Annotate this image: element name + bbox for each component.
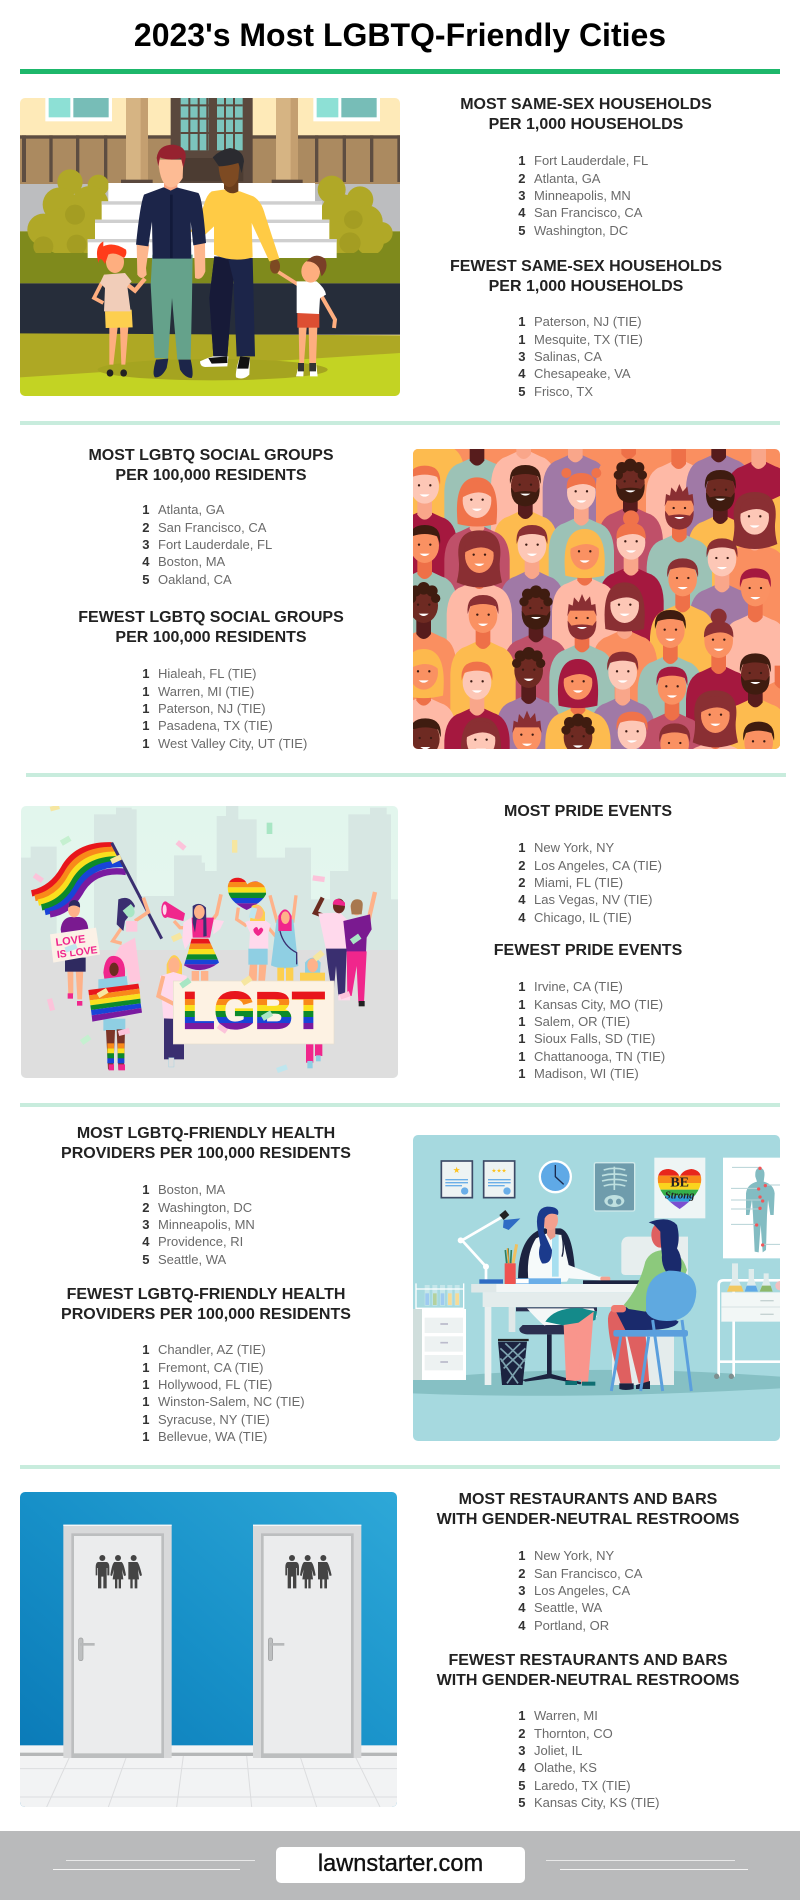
list: fewest pride events: 1 (518, 1014, 526, 1029)
list: most same-sex households: Atlanta, GA (534, 171, 600, 186)
list: fewest pride events: 1 (518, 1066, 526, 1081)
list: most pride events: 2 (518, 875, 526, 890)
city skyline (20, 806, 398, 950)
rainbow heart poster: BE (670, 1176, 689, 1191)
panel: gender-neutral restrooms (20, 1491, 739, 1810)
list: most health providers: Minneapolis, MN (158, 1217, 255, 1232)
confetti (33, 805, 361, 1073)
list: most health providers: 1 (142, 1182, 150, 1197)
list: fewest gender-neutral restrooms: 1 (518, 1708, 526, 1723)
list: most gender-neutral restrooms: 3 (518, 1583, 526, 1598)
list: most gender-neutral restrooms: San Francisco, CA (534, 1566, 642, 1581)
list: fewest same-sex households: 1 (518, 332, 526, 347)
list: fewest gender-neutral restrooms: Kansas City, KS (TIE) (534, 1795, 659, 1810)
list: fewest gender-neutral restrooms: Warren, MI (534, 1708, 598, 1723)
heading: fewest gender-neutral restrooms: FEWEST RESTAURANTS AND BARS (448, 1652, 728, 1669)
list: most gender-neutral restrooms: Seattle, WA (534, 1600, 602, 1615)
list: fewest gender-neutral restrooms: 2 (518, 1726, 526, 1741)
heading: most social groups: PER 100,000 RESIDENTS (115, 467, 307, 484)
list: fewest social groups: Pasadena, TX (TIE) (158, 718, 273, 733)
list: fewest pride events: Chattanooga, TN (TIE) (534, 1049, 665, 1064)
list: most social groups: San Francisco, CA (158, 520, 266, 535)
panel: health providers (61, 1125, 780, 1444)
list: most health providers: Boston, MA (158, 1182, 225, 1197)
patient on blue chair (608, 1219, 696, 1391)
rainbow heart poster: Strong (665, 1190, 695, 1201)
heading: most health providers: PROVIDERS PER 100,000 RESIDENTS (61, 1145, 351, 1162)
panel: same-sex households (20, 96, 722, 399)
man in yellow sweater (190, 148, 280, 379)
list: fewest pride events: Kansas City, MO (TIE) (534, 997, 663, 1012)
list: fewest pride events: Sioux Falls, SD (TIE) (534, 1031, 655, 1046)
list: most pride events: Miami, FL (TIE) (534, 875, 623, 890)
person with heart t-shirt (237, 904, 276, 981)
list: most gender-neutral restrooms: 1 (518, 1548, 526, 1563)
footer brand pill: lawnstarter.com (318, 1851, 483, 1877)
woman with megaphone and rainbow skirt (161, 894, 224, 981)
list: most pride events: 2 (518, 858, 526, 873)
heading: most gender-neutral restrooms (436, 1491, 739, 1528)
two people cheering (315, 892, 375, 1006)
list: fewest social groups: Hialeah, FL (TIE) (158, 666, 256, 681)
illustration: crowd of diverse people (413, 449, 780, 749)
heading: fewest social groups: FEWEST LGBTQ SOCIAL GROUPS (78, 609, 344, 626)
list: fewest social groups (142, 666, 307, 751)
list: fewest gender-neutral restrooms: Olathe, KS (534, 1760, 597, 1775)
list: fewest health providers: 1 (142, 1360, 150, 1375)
wall clock (539, 1160, 572, 1193)
list: fewest pride events: Madison, WI (TIE) (534, 1066, 639, 1081)
list: most same-sex households: Washington, DC (534, 223, 628, 238)
list: most pride events: New York, NY (534, 840, 614, 855)
title: 2023's Most LGBTQ-Friendly Cities (134, 17, 666, 53)
rainbow heart poster (654, 1158, 705, 1218)
wastebasket (498, 1340, 529, 1385)
list: fewest same-sex households: Chesapeake, VA (534, 366, 631, 381)
list: fewest social groups: 1 (142, 718, 150, 733)
list: most same-sex households: Fort Lauderdale, FL (534, 153, 648, 168)
list: most social groups: 1 (142, 502, 150, 517)
list: fewest health providers (142, 1342, 305, 1444)
list: most social groups: 4 (142, 554, 150, 569)
list: fewest health providers: Bellevue, WA (TIE) (158, 1429, 267, 1444)
list: fewest pride events: 1 (518, 979, 526, 994)
test tubes and drawers (412, 1283, 466, 1380)
list: fewest social groups: 1 (142, 684, 150, 699)
desk (471, 1278, 674, 1385)
list: most social groups: Oakland, CA (158, 572, 232, 587)
framed certificates (441, 1161, 515, 1198)
heading: fewest same-sex households: FEWEST SAME-SEX HOUSEHOLDS (450, 258, 722, 275)
list: fewest same-sex households: 4 (518, 366, 526, 381)
heading: most gender-neutral restrooms: WITH GENDER-NEUTRAL RESTROOMS (437, 1511, 739, 1528)
list: fewest health providers: 1 (142, 1394, 150, 1409)
framed certificates: ★★★ (491, 1167, 507, 1174)
heading: fewest same-sex households (450, 258, 722, 295)
list: fewest health providers: Hollywood, FL (TIE) (158, 1377, 272, 1392)
heading: most social groups: MOST LGBTQ SOCIAL GROUPS (88, 447, 334, 464)
heading: most health providers: MOST LGBTQ-FRIENDLY HEALTH (77, 1125, 335, 1142)
front row of people (410, 690, 774, 866)
heading: fewest social groups: PER 100,000 RESIDENTS (115, 629, 307, 646)
list: most social groups: Boston, MA (158, 554, 225, 569)
back row of people (399, 426, 800, 619)
list: fewest pride events (518, 979, 665, 1081)
list: fewest health providers: Syracuse, NY (TIE) (158, 1412, 270, 1427)
person with LOVE IS LOVE sign: LOVE (55, 933, 86, 949)
heading: fewest health providers (61, 1286, 351, 1323)
floor and baseboard (20, 1745, 397, 1807)
list: fewest social groups: 1 (142, 666, 150, 681)
list: fewest pride events: Irvine, CA (TIE) (534, 979, 623, 994)
left door (63, 1525, 172, 1758)
boy (278, 256, 335, 376)
girl (94, 241, 145, 377)
list: fewest same-sex households: Mesquite, TX (TIE) (534, 332, 643, 347)
list: fewest gender-neutral restrooms: 4 (518, 1760, 526, 1775)
footer (0, 1831, 800, 1900)
list: fewest same-sex households: Frisco, TX (534, 384, 593, 399)
person in blue dress (270, 895, 298, 981)
person with LOVE IS LOVE sign: IS LOVE (56, 945, 98, 961)
list: most health providers: Seattle, WA (158, 1252, 226, 1267)
list: most social groups: Atlanta, GA (158, 502, 224, 517)
list: most pride events: 1 (518, 840, 526, 855)
person with rainbow placard (88, 956, 142, 1070)
list: fewest gender-neutral restrooms: Laredo, TX (TIE) (534, 1778, 631, 1793)
list: most gender-neutral restrooms: 4 (518, 1600, 526, 1615)
heading: most social groups (88, 447, 334, 484)
list: most pride events: 4 (518, 910, 526, 925)
list: most pride events: Chicago, IL (TIE) (534, 910, 632, 925)
list: fewest pride events: 1 (518, 1031, 526, 1046)
list: most pride events: Los Angeles, CA (TIE) (534, 858, 662, 873)
list: most gender-neutral restrooms: 4 (518, 1618, 526, 1633)
green title rule (20, 69, 780, 74)
list: most pride events (518, 840, 662, 925)
list: fewest health providers: 1 (142, 1429, 150, 1444)
list: fewest gender-neutral restrooms: 5 (518, 1795, 526, 1810)
bushes (27, 169, 393, 256)
illustration: gender-neutral restroom doors (20, 1492, 397, 1807)
list: fewest health providers: 1 (142, 1342, 150, 1357)
LGBT banner: LGBT (183, 982, 324, 1039)
list: most social groups: 2 (142, 520, 150, 535)
lower row of people (391, 582, 800, 837)
blonde person holding banner (158, 955, 187, 1067)
list: most health providers: 3 (142, 1217, 150, 1232)
list: fewest social groups: West Valley City, UT (TIE) (158, 736, 307, 751)
rainbow flag (32, 845, 126, 914)
panel: pride events (21, 803, 682, 1081)
list: fewest gender-neutral restrooms: Thornton, CO (534, 1726, 613, 1741)
list: most same-sex households: 4 (518, 205, 526, 220)
list: fewest gender-neutral restrooms: 5 (518, 1778, 526, 1793)
heading: fewest health providers: PROVIDERS PER 100,000 RESIDENTS (61, 1306, 351, 1323)
heading: fewest same-sex households: PER 1,000 HOUSEHOLDS (489, 278, 683, 295)
list: fewest gender-neutral restrooms: Joliet, IL (534, 1743, 582, 1758)
rainbow heart (227, 876, 267, 911)
list: fewest same-sex households: 5 (518, 384, 526, 399)
list: fewest health providers: Winston-Salem, NC (TIE) (158, 1394, 305, 1409)
anatomy chart (723, 1158, 780, 1258)
heading: most same-sex households (460, 96, 712, 133)
heading: fewest social groups (78, 609, 344, 646)
man in navy shirt (136, 145, 206, 378)
person with LOVE IS LOVE sign (50, 900, 100, 1006)
list: most social groups (142, 502, 272, 587)
list: fewest social groups: 1 (142, 701, 150, 716)
list: most same-sex households (518, 153, 648, 238)
list: most health providers: 4 (142, 1234, 150, 1249)
list: fewest same-sex households: 1 (518, 314, 526, 329)
flag-holder woman (113, 898, 148, 983)
list: most social groups: Fort Lauderdale, FL (158, 537, 272, 552)
list: fewest health providers: Chandler, AZ (TIE) (158, 1342, 266, 1357)
list: most gender-neutral restrooms (518, 1548, 642, 1633)
list: most pride events: 4 (518, 892, 526, 907)
list: fewest social groups: Warren, MI (TIE) (158, 684, 254, 699)
illustration: family in front of house (20, 98, 400, 396)
illustration: doctor's office (413, 1135, 780, 1441)
footer brand pill (276, 1847, 525, 1883)
list: fewest same-sex households (518, 314, 643, 399)
list: most gender-neutral restrooms: Los Angeles, CA (534, 1583, 630, 1598)
framed certificates: ★ (453, 1166, 461, 1176)
list: most gender-neutral restrooms: New York, NY (534, 1548, 614, 1563)
heading: fewest gender-neutral restrooms (436, 1652, 739, 1689)
illustration: pride parade (21, 806, 398, 1078)
heading: most health providers (61, 1125, 351, 1162)
list: fewest social groups: Paterson, NJ (TIE) (158, 701, 266, 716)
heading: most same-sex households: PER 1,000 HOUSEHOLDS (489, 116, 683, 133)
list: fewest pride events: Salem, OR (TIE) (534, 1014, 630, 1029)
list: fewest social groups: 1 (142, 736, 150, 751)
panel: social groups (78, 447, 780, 751)
heading: fewest health providers: FEWEST LGBTQ-FRIENDLY HEALTH (67, 1286, 345, 1303)
list: most gender-neutral restrooms: 2 (518, 1566, 526, 1581)
right door (253, 1525, 361, 1758)
heading: fewest gender-neutral restrooms: WITH GENDER-NEUTRAL RESTROOMS (437, 1672, 739, 1689)
person in blue behind banner (300, 958, 325, 1068)
list: fewest gender-neutral restrooms: 3 (518, 1743, 526, 1758)
upper row of people (392, 459, 788, 739)
list: fewest gender-neutral restrooms (518, 1708, 659, 1810)
list: fewest same-sex households: 3 (518, 349, 526, 364)
list: most health providers (142, 1182, 255, 1267)
list: most health providers: 2 (142, 1200, 150, 1215)
heading: most same-sex households: MOST SAME-SEX HOUSEHOLDS (460, 96, 712, 113)
list: most same-sex households: San Francisco, CA (534, 205, 642, 220)
desk lamp (458, 1210, 520, 1284)
list: most pride events: Las Vegas, NV (TIE) (534, 892, 652, 907)
list: fewest same-sex households: Salinas, CA (534, 349, 602, 364)
heading: most gender-neutral restrooms: MOST RESTAURANTS AND BARS (459, 1491, 717, 1508)
heading: fewest pride events: FEWEST PRIDE EVENTS (494, 942, 682, 959)
list: most same-sex households: 5 (518, 223, 526, 238)
steps (88, 183, 337, 258)
list: fewest pride events: 1 (518, 1049, 526, 1064)
lab cart with flasks (714, 1263, 785, 1379)
office chair and doctor (516, 1207, 610, 1386)
list: most same-sex households: 3 (518, 188, 526, 203)
x-ray (594, 1163, 635, 1211)
list: fewest health providers: 1 (142, 1412, 150, 1427)
list: fewest health providers: Fremont, CA (TIE) (158, 1360, 263, 1375)
list: most social groups: 3 (142, 537, 150, 552)
list: most social groups: 5 (142, 572, 150, 587)
list: most same-sex households: 1 (518, 153, 526, 168)
list: most health providers: Washington, DC (158, 1200, 252, 1215)
pencil cup (505, 1244, 517, 1284)
list: most gender-neutral restrooms: Portland, OR (534, 1618, 609, 1633)
list: most health providers: 5 (142, 1252, 150, 1267)
list: most same-sex households: 2 (518, 171, 526, 186)
list: fewest same-sex households: Paterson, NJ (TIE) (534, 314, 642, 329)
computer monitor (621, 1237, 688, 1275)
list: most health providers: Providence, RI (158, 1234, 243, 1249)
list: fewest pride events: 1 (518, 997, 526, 1012)
list: most same-sex households: Minneapolis, MN (534, 188, 631, 203)
list: fewest health providers: 1 (142, 1377, 150, 1392)
heading: most pride events: MOST PRIDE EVENTS (504, 803, 672, 820)
